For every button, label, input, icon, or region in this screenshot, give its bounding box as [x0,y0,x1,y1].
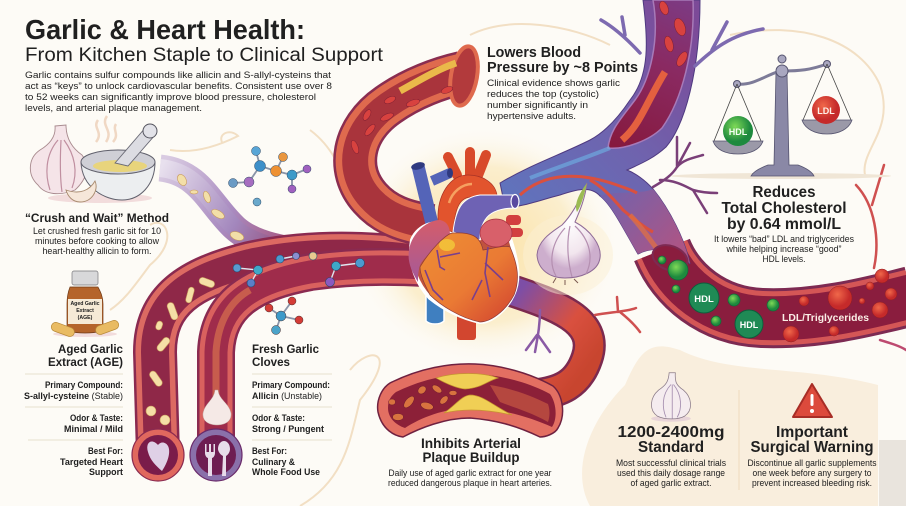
crush and wait method: heart-healthy allicin to form. [42,246,152,256]
pestle [115,127,155,166]
dosage text: 1200-2400mg [618,424,724,441]
inhibits arterial plaque text: Inhibits Arterial [421,435,521,451]
vessel: left lavender band into heart [160,168,425,255]
clove [66,181,96,202]
intro text: Garlic contains sulfur compounds like allicin and S-allyl-cysteins that [25,70,331,80]
HDL ball large: HDL [694,294,714,305]
intro text: levels, and arterial plaque management. [25,103,202,113]
comparison: aged garlic extract: Minimal / Mild [64,424,123,434]
comparison: fresh garlic cloves: Primary Compound: [252,380,330,390]
HDL ball small: HDL [740,320,759,330]
artery cross-section: plaque buildup [378,364,563,437]
LDL weight: LDL [817,106,835,116]
surgical warning text: Discontinue all garlic supplements [748,458,877,468]
lowers blood pressure text: Clinical evidence shows garlic [487,78,620,88]
vessel: aged garlic artery [146,254,425,455]
comparison: aged garlic extract [24,342,123,477]
corner patch [879,440,906,506]
plaque deposits [436,374,512,415]
icon: garlic and mortar [30,124,157,203]
lowers blood pressure text: Lowers Blood [487,44,581,61]
heart [409,152,523,340]
HDL ball large [689,283,719,313]
comparison: fresh garlic cloves: Allicin (Unstable) [252,391,322,401]
reduces total cholesterol text [714,184,854,264]
reduces total cholesterol text: It lowers “bad” LDL and triglycerides [714,234,854,244]
garlic bulb: centre [523,183,613,295]
surgical warning text: Important [776,424,849,441]
molecule: in vessel [233,252,364,287]
surgical warning text: prevent increased bleeding risk. [752,478,872,488]
molecule: lower [265,297,303,334]
surgical warning text: Surgical Warning [750,439,874,456]
comparison: fresh garlic cloves: Cloves [252,355,290,369]
comparison: fresh garlic cloves: Whole Food Use [252,467,320,477]
comparison: aged garlic extract: Primary Compound: [45,380,123,390]
reduces total cholesterol text: by 0.64 mmol/L [727,216,841,233]
lowers blood pressure text [487,44,638,121]
dosage text [616,424,726,488]
cream panel: bottom right [582,346,878,506]
surgical warning text: one week before any surgery to [752,468,872,478]
LDL weight [812,96,840,124]
blood particles: HDL and LDL [658,256,897,342]
icon: garlic in vessel [203,390,231,425]
vessel: top left artery with plaque [350,44,482,226]
title block: From Kitchen Staple to Clinical Support [25,45,384,66]
comparison: fresh garlic cloves: Culinary & [252,457,295,467]
icon: heart badge [132,429,184,481]
vessel: top right purple artery [500,0,763,275]
crush and wait method: Let crushed fresh garlic sit for 10 [33,226,161,236]
vessel: right lower artery [662,250,906,318]
lowers blood pressure text: Pressure by ~8 Points [487,59,638,76]
comparison: fresh garlic cloves [252,342,332,477]
dosage text: of aged garlic extract. [630,478,712,488]
icon: supplement bottle: Aged Garlic [70,301,100,307]
comparison: aged garlic extract: S-allyl-cysteine (Stable) [24,391,123,401]
steam [96,116,116,142]
icon: supplement bottle: (AGE) [78,315,93,321]
icon: balance scale [671,55,891,179]
comparison: fresh garlic cloves: Best For: [252,446,287,456]
comparison: aged garlic extract: Odor & Taste: [70,413,123,423]
crush and wait method: minutes before cooking to allow [35,236,159,246]
lowers blood pressure text: number significantly in [487,100,588,110]
intro text: act as “keys” to unlock cardiovascular benefits. Consistent use over 8 [25,81,332,91]
crush and wait method: “Crush and Wait” Method [25,211,169,225]
inhibits arterial plaque text [388,435,552,488]
reduces total cholesterol text: while helping increase “good” [726,244,842,254]
icon: small garlic bulb [651,373,691,422]
comparison: fresh garlic cloves: Odor & Taste: [252,413,305,423]
lowers blood pressure text: reduces the top (cystolic) [487,89,599,99]
mortar [81,162,155,200]
garlic bulb [30,125,87,194]
comparison: aged garlic extract: Targeted Heart [60,457,123,467]
surgical warning text [748,424,877,488]
title block: Garlic & Heart Health: [25,14,305,45]
dosage text: Most successful clinical trials [616,458,726,468]
icon: fork and spoon badge [190,429,242,481]
crush and wait method [25,211,169,256]
molecule: upper [228,146,311,206]
HDL weight: HDL [729,127,748,137]
intro text: to 52 weeks can significantly improve blood pressure, cholesterol [25,92,316,102]
intro text [25,70,332,113]
background glow behind heart [350,125,620,365]
comparison: aged garlic extract: Aged Garlic [58,342,123,356]
vessel branches right [856,165,906,350]
HDL weight [723,116,753,146]
inhibits arterial plaque text: Daily use of aged garlic extract for one year [388,468,552,478]
comparison: fresh garlic cloves: Strong / Pungent [252,424,324,434]
inhibits arterial plaque text: reduced dangerous plaque in heart arteries. [388,478,552,488]
vessel: fresh garlic artery [216,267,425,455]
comparison: fresh garlic cloves: Fresh Garlic [252,342,319,356]
HDL ball small [735,310,763,338]
comparison: aged garlic extract: Extract (AGE) [48,355,123,369]
comparison: aged garlic extract: Support [89,467,123,477]
reduces total cholesterol text: Total Cholesterol [722,200,846,217]
lowers blood pressure text: hypertensive adults. [487,111,576,121]
title block [25,14,384,66]
icon: supplement bottle [50,271,120,338]
dosage text: used this daily dosage range [617,468,725,478]
vessel: bottom heart artery [510,290,640,395]
icon: warning triangle [793,384,832,417]
comparison: aged garlic extract: Best For: [88,446,123,456]
reduces total cholesterol text: Reduces [752,184,816,201]
icon: supplement bottle: Extract [76,308,94,314]
panel divider [738,390,740,490]
LDL triglycerides label: LDL/Triglycerides [782,313,869,324]
inhibits arterial plaque text: Plaque Buildup [422,449,520,465]
dosage text: Standard [638,439,704,456]
shadow [48,193,152,203]
reduces total cholesterol text: HDL levels. [762,254,806,264]
